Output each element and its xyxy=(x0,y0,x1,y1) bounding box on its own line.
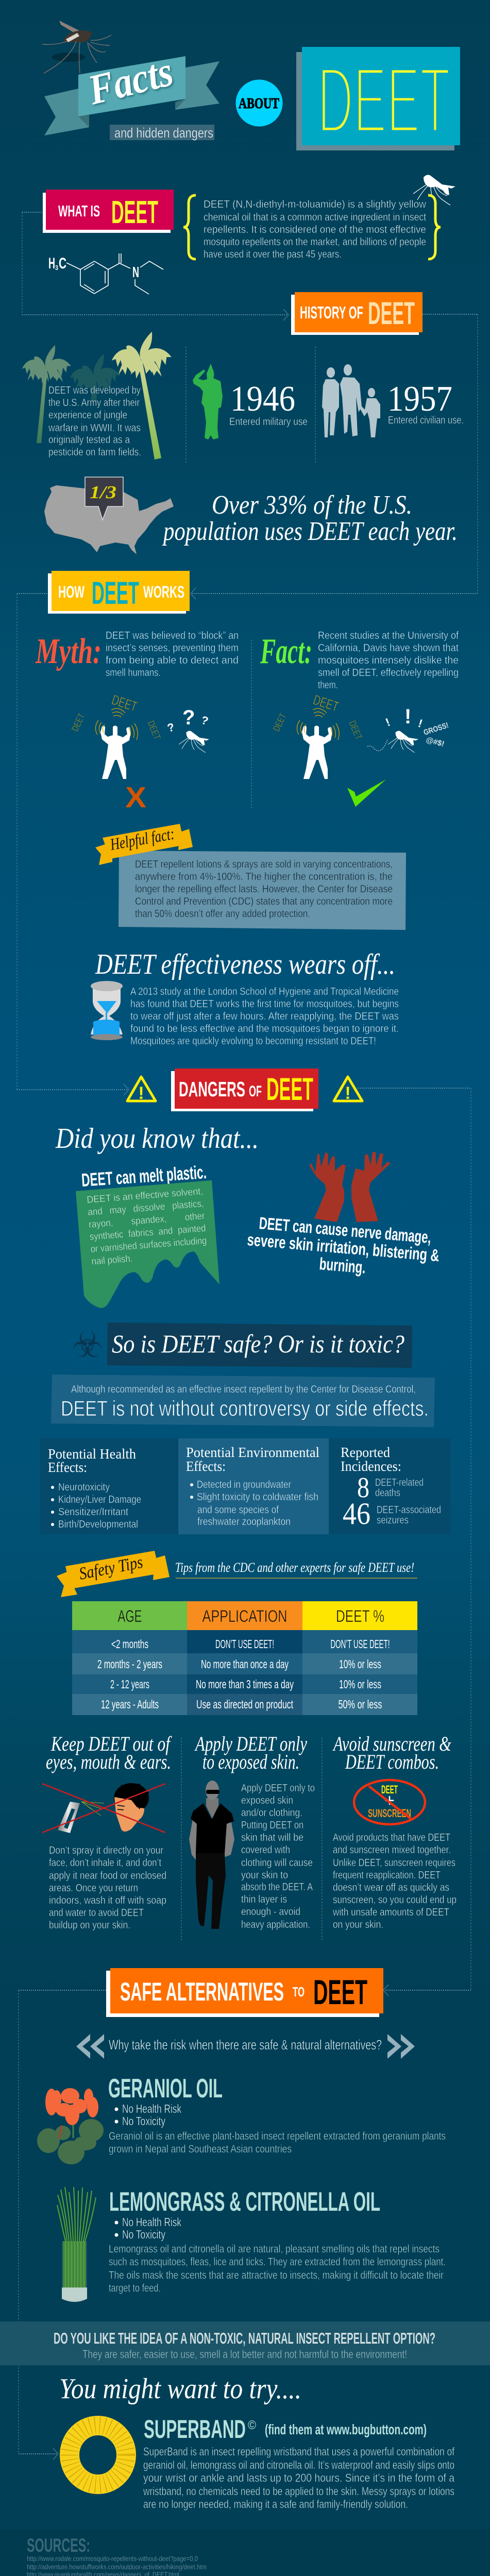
text block: wearing off study: has found that DEET works the first time for mosquitoes, but begins xyxy=(130,998,399,1010)
panel: potential health effects: Birth/Developmental xyxy=(58,1519,138,1530)
panel: geraniol oil: No Health Risk xyxy=(122,2102,181,2115)
text block: apply thin layer: thin layer is xyxy=(241,1894,287,1905)
text block: don't spray: Don’t spray it directly on your xyxy=(49,1845,163,1856)
text block: don't spray: areas. Once you return xyxy=(49,1883,138,1894)
text block: don't spray: buildup on your skin. xyxy=(49,1920,130,1931)
diagram: DEET molecule: C xyxy=(59,255,66,272)
heading: sources: SOURCES: xyxy=(27,2535,90,2556)
badge: about: ABOUT xyxy=(239,96,279,112)
text block: myth body xyxy=(106,630,239,679)
text block: avoid products: on your skin. xyxy=(333,1919,383,1930)
illustration: man with DEET and repelled mosquito: ! xyxy=(416,717,424,730)
panel: geraniol oil xyxy=(108,2074,446,2155)
title word: Facts: Facts xyxy=(83,47,177,114)
section badge: safe alternatives: TO xyxy=(293,1984,305,1999)
illustration: man with DEET and confused mosquito: DEET xyxy=(110,692,139,715)
heading: avoid sunscreen: Avoid sunscreen & xyxy=(332,1732,451,1755)
stat: 1957: 1957 xyxy=(387,379,452,419)
icon: no DEET plus sunscreen: SUNSCREEN xyxy=(368,1807,411,1820)
ribbon: safety tips: Safety Tips xyxy=(77,1553,144,1584)
text block: wearing off study: A 2013 study at the London School of Hygiene and Tropical Medicine xyxy=(130,986,399,997)
panel: potential health effects: Kidney/Liver Damage xyxy=(58,1494,141,1505)
text block: solvent: rayon, spandex, other xyxy=(88,1211,206,1230)
text block: solvent xyxy=(87,1186,208,1267)
badge: about xyxy=(236,79,282,127)
icon: warning triangle right xyxy=(334,1077,362,1103)
section badge: how DEET works xyxy=(48,571,190,614)
statement: population usage xyxy=(162,490,458,546)
illustration: yellow wristband xyxy=(70,2426,126,2484)
icon: no DEET plus sunscreen: + xyxy=(384,1791,395,1810)
icon: no DEET plus sunscreen xyxy=(354,1780,425,1824)
section badge: what is DEET xyxy=(43,190,174,233)
text block: DEET origin: the U.S. Army after their xyxy=(48,397,140,409)
panel: superband: © xyxy=(248,2418,256,2432)
heading: avoid sunscreen xyxy=(332,1732,451,1773)
heading: keep DEET out: Keep DEET out of xyxy=(50,1732,172,1755)
footer panel: sources xyxy=(0,2529,490,2576)
text block: concentrations: than 50% doesn’t offer any added protection. xyxy=(135,908,310,920)
icon: X mark: X xyxy=(125,781,146,814)
panel: lemongrass and citronella oil: target to feed. xyxy=(109,2282,161,2294)
diagram: DEET molecule xyxy=(48,253,163,294)
panel: potential health effects: Sensitizer/Irritant xyxy=(58,1506,128,1518)
panel: reported incidences: Reported xyxy=(341,1445,390,1460)
table: DEET use by age: 2 months - 2 years xyxy=(97,1657,162,1671)
heading: effectiveness wears off: DEET effectiveness wears off... xyxy=(95,948,395,980)
heading: Myth: Myth: xyxy=(35,632,102,671)
heading: melt plastic: DEET can melt plastic. xyxy=(81,1161,207,1191)
stat: 8 deaths xyxy=(357,1472,424,1504)
table: DEET use by age: 12 years - Adults xyxy=(101,1698,159,1711)
illustration: palm trees xyxy=(22,332,172,460)
section badge: history of DEET: DEET xyxy=(368,296,415,331)
panel: potential environmental effects: Effects: xyxy=(186,1459,226,1474)
section badge: dangers of DEET: DANGERS xyxy=(179,1077,245,1101)
panel: safe or toxic heading xyxy=(107,1323,412,1368)
text block: apply thin layer: absorb the DEET. A xyxy=(241,1882,313,1893)
text block: avoid products: sunscreen, so you could end up xyxy=(333,1894,457,1906)
heading: keep DEET out: eyes, mouth & ears. xyxy=(46,1750,171,1773)
illustration: person in dark clothing xyxy=(189,1781,234,1929)
icon: warning triangle left xyxy=(127,1077,156,1103)
text block: DEET origin xyxy=(48,385,141,458)
illustration: man with DEET and confused mosquito: DEET xyxy=(70,711,88,733)
illustration: man with DEET and repelled mosquito: ! xyxy=(384,716,392,729)
text block: definition of DEET xyxy=(183,195,441,260)
panel: geraniol oil: No Toxicity xyxy=(122,2114,165,2128)
section badge: safe alternatives: DEET xyxy=(313,1973,367,2012)
text block: DEET origin: warfare in WWII. It was xyxy=(48,422,141,434)
text block: DEET origin: DEET was developed by xyxy=(48,385,141,396)
text block: wearing off study: found to be less effective and the mosquitoes began to ignore it. xyxy=(130,1023,399,1035)
panel: safe or toxic heading: So is DEET safe? Or is it toxic? xyxy=(112,1329,404,1358)
stat: 46 seizures: 46 xyxy=(343,1497,370,1531)
heading: did you know: Did you know that... xyxy=(55,1123,259,1155)
section badge: how DEET works: WORKS xyxy=(143,583,184,601)
text block: avoid products: frequent reapplication. DEET xyxy=(333,1870,441,1881)
panel: keep out of eyes xyxy=(42,1732,172,1931)
list: source links: http://adventure.howstuffworks.com/outdoor-activities/hiking/deet.htm xyxy=(27,2563,207,2571)
panel: not without controversy: Although recommended as an effective insect repellent by the Center for Disease Control, xyxy=(71,1384,416,1395)
text block: avoid products: with unsafe amounts of DEET xyxy=(332,1907,449,1918)
section badge: how DEET works: HOW xyxy=(58,583,85,601)
panel: potential environmental effects: Potential Environmental xyxy=(186,1445,319,1460)
panel: potential health effects: Neurotoxicity xyxy=(58,1482,110,1493)
text block: apply thin layer: Putting DEET on xyxy=(241,1820,303,1831)
table: DEET use by age: 10% or less xyxy=(339,1657,381,1671)
heading: keep DEET out xyxy=(46,1732,172,1773)
icon: hourglass xyxy=(91,981,123,1040)
section badge: how DEET works: DEET xyxy=(92,575,139,611)
band: non-toxic option xyxy=(0,2321,490,2365)
illustration: man with DEET and repelled mosquito: ! xyxy=(404,705,411,728)
table: DEET use by age: DON’T USE DEET! xyxy=(331,1637,390,1651)
icon: family silhouettes xyxy=(322,364,380,437)
text block: solvent: or varnished surfaces including xyxy=(90,1235,207,1255)
panel: superband: your wrist or ankle and lasts up to 200 hours. Since it’s in the form of a xyxy=(143,2471,455,2484)
text block: apply thin layer xyxy=(241,1783,315,1930)
text block: nerve damage xyxy=(246,1213,440,1277)
text block: fact body: mosquitoes intensely dislike the xyxy=(318,655,459,666)
stat: 1946: 1946 xyxy=(230,379,295,419)
stat: 8 deaths: 8 xyxy=(357,1472,369,1504)
heading: Fact: Fact: xyxy=(260,632,312,671)
ribbon: helpful fact: Helpful fact: xyxy=(108,824,176,854)
panel: melted plastic xyxy=(76,1180,219,1308)
stat: 46 seizures: seizures xyxy=(377,1515,409,1526)
stat: 8 deaths: DEET-related xyxy=(375,1477,424,1488)
icon: warning triangle right: ! xyxy=(345,1083,351,1103)
ribbon: safety tips xyxy=(57,1551,170,1597)
panel: reported incidences xyxy=(329,1438,450,1534)
text block: concentrations: anywhere from 4%-100%. The higher the concentration is, the xyxy=(135,871,393,883)
diagram: DEET molecule: 3 xyxy=(55,264,58,272)
illustration: man with DEET and repelled mosquito: @#$! xyxy=(425,735,445,749)
section badge: what is DEET: WHAT IS xyxy=(58,202,100,220)
illustration: man with DEET and confused mosquito: ? xyxy=(200,714,210,727)
icon: biohazard: ☣ xyxy=(72,1324,103,1366)
text block: apply thin layer: clothing will cause xyxy=(241,1857,313,1869)
table: DEET use by age: DON’T USE DEET! xyxy=(215,1637,274,1651)
text block: don't spray xyxy=(49,1845,166,1931)
map: USA with one third pin xyxy=(44,477,174,554)
panel: potential environmental effects: Slight toxicity to coldwater fish xyxy=(197,1492,318,1503)
illustration: geranium xyxy=(37,2088,104,2164)
section badge: safe alternatives: SAFE ALTERNATIVES xyxy=(120,1977,284,2006)
stat: 1957: Entered civilian use. xyxy=(388,415,464,426)
stat: 46 seizures: DEET-associated xyxy=(377,1504,441,1516)
subtitle: tips from the CDC: Tips from the CDC and other experts for safe DEET use! xyxy=(175,1560,414,1575)
table: DEET use by age: 50% or less xyxy=(338,1698,382,1711)
panel: superband: are no longer needed, making it a safe and family-friendly solution. xyxy=(143,2498,408,2511)
text block: apply thin layer: your skin to xyxy=(241,1870,288,1881)
icon: photographic mosquito xyxy=(42,21,111,73)
text block: concentrations: longer the repelling effect lasts. However, the Center for Disease xyxy=(135,884,393,895)
table: DEET use by age: AGE xyxy=(117,1607,142,1625)
panel: superband: SUPERBAND xyxy=(144,2415,246,2444)
panel: avoid combos xyxy=(332,1732,457,1930)
illustration: man with DEET and repelled mosquito xyxy=(271,692,450,779)
table: DEET use by age: 10% or less xyxy=(339,1677,381,1691)
illustration: man with DEET and repelled mosquito: GROSS! xyxy=(423,721,450,737)
text block: avoid products: Unlike DEET, sunscreen requires xyxy=(333,1857,455,1869)
panel: potential health effects: Effects: xyxy=(48,1460,87,1475)
panel: lemongrass and citronella oil xyxy=(109,2187,446,2294)
stat: 1946: Entered military use xyxy=(229,416,308,428)
stat: 46 seizures xyxy=(343,1497,441,1531)
text block: avoid products: doesn’t wear off as quickly as xyxy=(333,1882,449,1893)
panel: not without controversy xyxy=(51,1375,435,1427)
text block: wearing off study xyxy=(130,986,399,1047)
text block: solvent: nail polish. xyxy=(91,1253,133,1267)
text block: apply thin layer: heavy application. xyxy=(241,1919,310,1930)
text block: DEET origin: pesticide on farm fields. xyxy=(48,447,141,458)
text block: avoid products: and sunscreen mixed together. xyxy=(333,1844,451,1856)
panel: lemongrass and citronella oil: No Health Risk xyxy=(122,2215,181,2229)
list: source links: http://www.rodale.com/mosquito-repellents-without-deet?page=0,0 xyxy=(27,2554,198,2563)
panel: apply to exposed skin xyxy=(189,1732,315,1930)
section badge: dangers of DEET: OF xyxy=(249,1083,262,1100)
panel: superband xyxy=(143,2415,455,2511)
illustration: lemongrass in vase xyxy=(57,2187,96,2302)
panel: myth xyxy=(35,630,239,814)
text block: don't spray: apply it near food or enclosed xyxy=(49,1870,166,1882)
panel: potential environmental effects xyxy=(178,1438,329,1534)
illustration: man with DEET and repelled mosquito: DEET xyxy=(346,719,364,741)
section badge: dangers of DEET xyxy=(171,1069,318,1111)
icon: warning triangle left: ! xyxy=(138,1083,144,1103)
table: DEET use by age: No more than 3 times a day xyxy=(196,1677,294,1691)
ribbon: helpful fact xyxy=(95,824,193,865)
text block: myth body: smell humans. xyxy=(106,667,161,679)
diagram: DEET molecule: H xyxy=(48,255,55,272)
text block: avoid products xyxy=(332,1832,457,1930)
statement: population usage: Over 33% of the U.S. xyxy=(212,490,412,520)
text block: fact body xyxy=(318,630,459,691)
text block: fact body: smell of DEET, effectively repelling xyxy=(318,667,459,679)
icon: white mosquito xyxy=(413,175,455,205)
illustration: man with DEET and confused mosquito xyxy=(70,692,210,779)
text block: definition of DEET: DEET (N,N-diethyl-m-toluamide) is a slightly yellow xyxy=(204,199,427,210)
heading: apply DEET only: to exposed skin. xyxy=(202,1750,299,1773)
table: DEET use by age: DEET % xyxy=(336,1607,384,1625)
illustration: man with DEET and repelled mosquito: DEET xyxy=(271,711,289,733)
text block: myth body: insect’s senses, preventing them xyxy=(106,642,239,654)
icon: burned arms xyxy=(309,1152,391,1222)
panel: reported incidences: Incidences: xyxy=(341,1459,401,1474)
text block: fact body: them. xyxy=(318,680,338,691)
text block: concentrations: DEET repellent lotions & sprays are sold in varying concentrations, xyxy=(135,859,393,870)
callout: helpful fact xyxy=(95,824,406,930)
banner: Facts ribbon xyxy=(44,47,219,135)
text block: don't spray: and water to avoid DEET xyxy=(49,1907,144,1919)
panel: geraniol oil: GERANIOL OIL xyxy=(108,2074,223,2104)
subtitle: and hidden dangers: and hidden dangers xyxy=(114,125,213,141)
illustration: man with DEET and repelled mosquito: DEET xyxy=(311,692,341,715)
section badge: safe alternatives xyxy=(106,1968,383,2017)
text block: apply thin layer: Apply DEET only to xyxy=(241,1783,315,1794)
text block: concentrations xyxy=(135,859,393,920)
panel: geraniol oil: grown in Nepal and Southeast Asian countries xyxy=(109,2143,292,2155)
text block: solvent: DEET is an effective solvent, xyxy=(87,1186,204,1206)
icon: check mark xyxy=(347,779,386,807)
text block: definition of DEET: mosquito repellents on the market, and billions of people xyxy=(204,236,426,248)
text block: wearing off study: Mosquitoes are quickly evolving to becoming resistant to DEET! xyxy=(130,1036,376,1047)
section badge: what is DEET: DEET xyxy=(111,195,158,230)
panel: potential health effects: Potential Health xyxy=(48,1446,136,1462)
panel: potential environmental effects: freshwater zooplankton xyxy=(197,1516,291,1528)
icon: saluting soldier xyxy=(193,364,223,439)
heading: apply DEET only: Apply DEET only xyxy=(194,1732,307,1755)
text block: wearing off study: to wear off just after a few hours. After reapplying, the DEET was xyxy=(130,1011,399,1022)
illustration: man with DEET and confused mosquito: ? xyxy=(182,706,195,729)
panel: potential health effects xyxy=(40,1438,178,1534)
stat: 8 deaths: deaths xyxy=(375,1487,400,1499)
text block: myth body: DEET was believed to “block” an xyxy=(106,630,239,641)
table: DEET use by age: No more than once a day xyxy=(201,1657,289,1671)
text block: DEET origin: experience of jungle xyxy=(48,410,127,421)
panel: potential environmental effects: Detected in groundwater xyxy=(197,1479,291,1490)
text block: apply thin layer: enough - avoid xyxy=(241,1906,300,1918)
text block: avoid products: Avoid products that have DEET xyxy=(333,1832,450,1843)
section badge: history of DEET xyxy=(291,292,423,335)
heading: avoid sunscreen: DEET combos. xyxy=(345,1750,439,1773)
table: DEET use by age: 2 - 12 years xyxy=(110,1677,149,1691)
text block: nerve damage: burning. xyxy=(318,1254,366,1277)
text block: definition of DEET: chemical oil that is a common active ingredient in insect xyxy=(204,212,426,223)
text block: apply thin layer: covered with xyxy=(241,1844,290,1856)
illustration: man with DEET and confused mosquito: ? xyxy=(166,720,176,735)
panel: lemongrass and citronella oil: No Toxicity xyxy=(122,2228,165,2241)
heading: you might want to try: You might want to try.... xyxy=(59,2373,301,2405)
table: DEET use by age: Use as directed on product xyxy=(196,1698,293,1711)
panel: potential environmental effects: and some species of xyxy=(197,1504,279,1516)
text block: DEET origin: originally tested as a xyxy=(48,434,130,446)
text block: don't spray: indoors, wash it off with soap xyxy=(49,1895,166,1906)
text block: apply thin layer: skin that will be xyxy=(241,1832,303,1843)
text block: concentrations: Control and Prevention (CDC) states that any concentration more xyxy=(135,896,393,907)
illustration: man with DEET and confused mosquito: DEET xyxy=(145,719,162,741)
callout: why take the risk xyxy=(76,2034,415,2059)
list: source links xyxy=(27,2554,330,2576)
table: DEET use by age xyxy=(72,1601,417,1715)
illustration: spray near face crossed out xyxy=(42,1783,165,1833)
text block: myth body: from being able to detect and xyxy=(106,655,239,666)
text block: solvent: synthetic fabrics and painted xyxy=(89,1223,206,1243)
diagram: DEET molecule: N xyxy=(132,264,139,281)
text block: apply thin layer: and/or clothing. xyxy=(241,1807,302,1819)
section badge: dangers of DEET: DEET xyxy=(266,1072,313,1107)
text block: definition of DEET: repellents. It is considered one of the most effective xyxy=(204,224,426,235)
text block: fact body: Recent studies at the University of xyxy=(318,630,459,641)
table: DEET use by age: APPLICATION xyxy=(202,1607,288,1625)
text block: solvent: and may dissolve plastics, xyxy=(88,1198,205,1218)
panel: fact xyxy=(260,630,459,807)
text block: apply thin layer: exposed skin xyxy=(241,1795,293,1806)
text block: don't spray: face, don’t inhale it, and don’t xyxy=(49,1857,161,1869)
band: non-toxic option: They are safer, easier to use, smell a lot better and not harmful to the environment! xyxy=(82,2348,407,2361)
table: DEET use by age: <2 months xyxy=(111,1637,148,1651)
callout: why take the risk: Why take the risk when there are safe & natural alternatives? xyxy=(109,2037,382,2053)
map: USA with one third pin: 1/3 xyxy=(90,482,116,502)
heading: apply DEET only xyxy=(194,1732,307,1773)
text block: fact body: California, Davis have shown that xyxy=(318,642,459,654)
section badge: history of DEET: HISTORY OF xyxy=(300,303,363,322)
icon: no DEET plus sunscreen: DEET xyxy=(381,1783,398,1796)
text block: definition of DEET: have used it over the past 45 years. xyxy=(204,249,342,260)
